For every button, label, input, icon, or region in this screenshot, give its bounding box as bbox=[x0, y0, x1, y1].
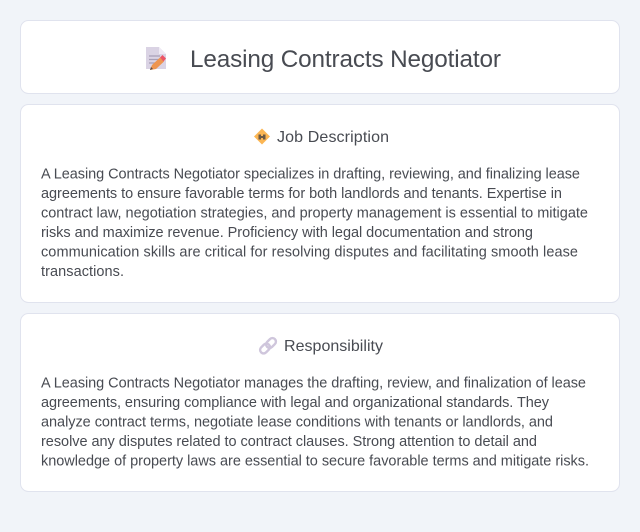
icon: document with pencil bbox=[146, 47, 166, 70]
heading: page title: Leasing Contracts Negotiator bbox=[190, 46, 501, 73]
panel: job description bbox=[20, 104, 620, 302]
text block: job description bbox=[41, 166, 588, 280]
icon: chain link bbox=[259, 337, 277, 355]
text block: job description: risks and maximize revenue. Proficiency with legal documentation and strong bbox=[41, 225, 533, 241]
text block: responsibility: knowledge of property laws are essential to secure favorable terms and mitigate risks. bbox=[41, 454, 589, 470]
text block: responsibility: agreements, ensuring compliance with legal and organizational standards. They bbox=[41, 395, 550, 411]
text block: responsibility bbox=[41, 376, 589, 470]
heading: responsibility: Responsibility bbox=[284, 338, 383, 355]
text block: job description: communication skills are critical for resolving disputes and facilitating smooth lease bbox=[41, 244, 578, 260]
text block: job description: agreements to ensure favorable terms for both landlords and tenants. Expertise in bbox=[41, 186, 562, 202]
text block: job description: contract law, negotiation strategies, and property management is essential to mitigate bbox=[41, 206, 588, 222]
panel: title bbox=[20, 20, 620, 94]
text block: responsibility: A Leasing Contracts Negotiator manages the drafting, review, and finalization of lease bbox=[41, 376, 586, 392]
text block: responsibility: analyze contract terms, negotiate lease conditions with tenants or landlords, and bbox=[41, 414, 553, 430]
text block: job description: A Leasing Contracts Negotiator specializes in drafting, reviewing, and finalizing lease bbox=[41, 166, 580, 182]
icon: orange diamond bbox=[254, 128, 270, 144]
text block: job description: transactions. bbox=[41, 264, 124, 280]
heading: job description: Job Description bbox=[277, 129, 389, 146]
panel: responsibility bbox=[20, 314, 620, 492]
text block: responsibility: resolve any disputes related to contract clauses. Strong attention to detail and bbox=[41, 434, 537, 450]
